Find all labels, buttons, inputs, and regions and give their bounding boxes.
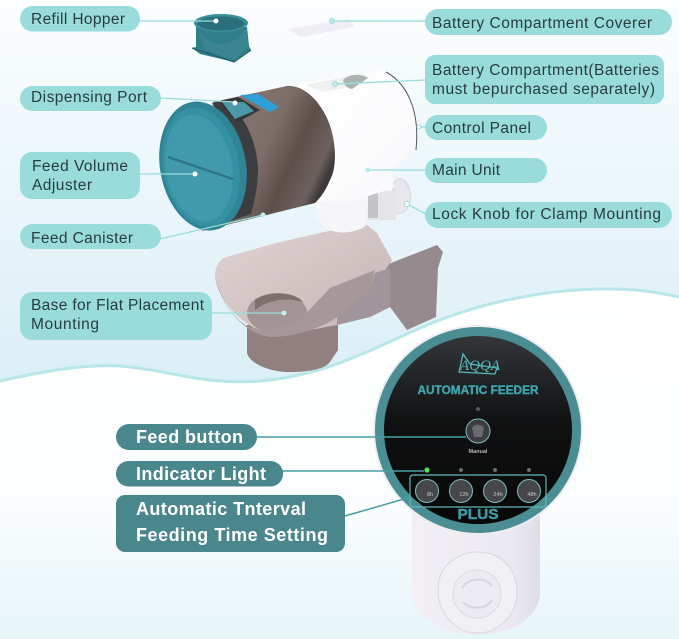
label: feed button xyxy=(116,424,257,450)
label: base xyxy=(20,292,212,340)
label: dispensing port xyxy=(20,86,161,111)
label: control panel xyxy=(425,115,547,140)
base for flat placement xyxy=(215,225,443,372)
label: base: Base for Flat Placement xyxy=(31,297,205,314)
control panel front xyxy=(373,325,583,635)
interval buttons: 48h xyxy=(527,492,537,498)
chute xyxy=(370,245,443,330)
label: main unit xyxy=(425,158,547,183)
teal front disc xyxy=(149,95,257,237)
label: control panel: Control Panel xyxy=(432,120,531,137)
knob xyxy=(438,552,517,633)
white body xyxy=(298,70,417,205)
control panel front: AQQA xyxy=(459,358,501,374)
label: refill hopper: Refill Hopper xyxy=(31,11,125,28)
mount xyxy=(412,510,540,635)
dark collar xyxy=(205,100,258,230)
label: feed canister xyxy=(20,224,161,249)
interval buttons: 24h xyxy=(493,492,503,498)
label: feed button: Feed button xyxy=(136,427,243,447)
label: battery compartment: Battery Compartment(Batteries xyxy=(432,62,659,79)
leader lines top xyxy=(139,18,426,316)
label: indicator light: Indicator Light xyxy=(136,464,266,484)
outer shell xyxy=(215,225,392,337)
inner bowl xyxy=(247,293,307,333)
neck xyxy=(315,178,368,233)
icon: refill hopper xyxy=(192,14,251,62)
status lights xyxy=(424,407,531,473)
label: lock knob xyxy=(425,202,672,228)
lock knob xyxy=(393,179,410,213)
manual button xyxy=(466,419,490,455)
label: automatic interval: Feeding Time Setting xyxy=(136,525,328,545)
label: lock knob: Lock Knob for Clamp Mounting xyxy=(432,206,661,223)
label: battery compartment: must bepurchased separately) xyxy=(432,81,655,98)
label: feed volume adjuster: Adjuster xyxy=(32,177,92,194)
label: refill hopper xyxy=(20,6,140,32)
canister xyxy=(202,86,335,231)
label: indicator light xyxy=(116,461,283,486)
label: feed volume adjuster xyxy=(20,152,140,199)
label: battery compartment xyxy=(425,55,664,104)
label: automatic interval xyxy=(116,495,345,552)
label: feed volume adjuster: Feed Volume xyxy=(32,158,128,175)
plus: PLUS xyxy=(458,506,498,523)
label: dispensing port: Dispensing Port xyxy=(31,89,148,106)
interval buttons: 8h xyxy=(427,492,433,498)
product name: AUTOMATIC FEEDER xyxy=(418,383,539,397)
label: base: Mounting xyxy=(31,316,99,333)
interval buttons: 12h xyxy=(459,492,469,498)
interval buttons xyxy=(410,475,546,507)
leader lines bottom xyxy=(257,437,466,516)
main unit xyxy=(149,70,417,237)
battery compartment xyxy=(305,73,369,92)
label: main unit: Main Unit xyxy=(432,162,501,179)
bracket xyxy=(330,170,394,204)
lower cylinder xyxy=(247,315,338,372)
label: automatic interval: Automatic Tnterval xyxy=(136,499,306,519)
label: battery compartment coverer: Battery Compartment Coverer xyxy=(432,15,652,32)
icon: battery cover xyxy=(281,15,355,37)
manual button: Manual xyxy=(469,449,488,455)
thread xyxy=(368,191,396,220)
label: feed canister: Feed Canister xyxy=(31,230,133,247)
blue sticker xyxy=(240,94,279,112)
logo xyxy=(459,354,497,374)
label: battery compartment coverer xyxy=(425,9,672,35)
front lip xyxy=(215,270,375,337)
dispensing port xyxy=(219,97,260,122)
